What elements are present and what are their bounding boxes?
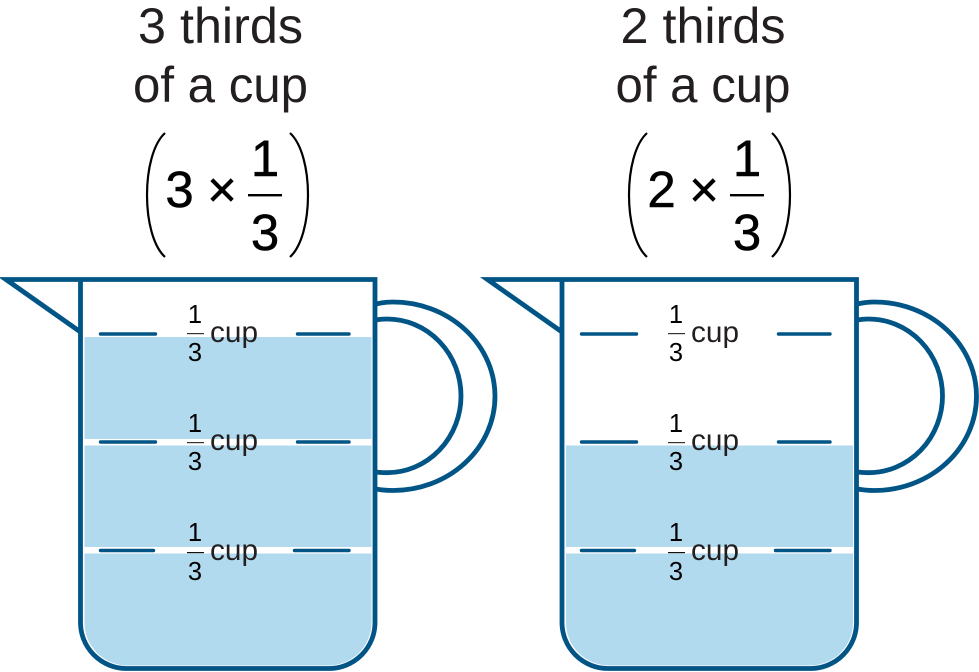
heading: 3 thirds of a cup (133, 0, 308, 113)
equation: 3 times one third (147, 130, 308, 261)
measure mark: middle one third cup: 3 (188, 448, 202, 476)
measure mark: middle one third cup (100, 410, 349, 476)
measure mark: middle one third cup: 1 (669, 410, 683, 438)
measure mark: top one third cup (100, 301, 349, 367)
measure mark: middle one third cup: cup (691, 424, 739, 457)
measure mark: bottom one third cup: 1 (669, 519, 683, 547)
heading: 2 thirds of a cup (616, 0, 790, 113)
measure mark: bottom one third cup: 1 (188, 519, 202, 547)
measure mark: top one third cup: cup (210, 316, 258, 349)
equation: 3 times one third: × (207, 161, 237, 218)
liquid fill: two thirds (566, 446, 853, 666)
measure mark: top one third cup: 3 (188, 339, 202, 367)
measure mark: bottom one third cup: 3 (669, 558, 683, 586)
measure mark: bottom one third cup: cup (210, 534, 258, 567)
measure mark: middle one third cup: 3 (669, 448, 683, 476)
measure mark: top one third cup: 3 (669, 339, 683, 367)
panel: three thirds of a cup (6, 0, 495, 668)
equation: 2 times one third: × (689, 161, 719, 218)
equation: 3 times one third: 3 (251, 204, 279, 261)
measure mark: top one third cup: cup (691, 316, 739, 349)
measure mark: top one third cup: 1 (188, 301, 202, 329)
measure mark: bottom one third cup: 3 (188, 558, 202, 586)
equation: 3 times one third: 3 (165, 161, 194, 218)
heading: 2 thirds of a cup: of a cup (616, 57, 790, 113)
liquid fill: three thirds (84, 337, 372, 666)
measuring cup outline (488, 280, 976, 668)
equation: 2 times one third: 2 (647, 161, 676, 218)
measure mark: bottom one third cup (582, 519, 830, 586)
equation: 2 times one third: 1 (733, 130, 761, 187)
measuring cup outline (6, 280, 495, 668)
measure mark: middle one third cup: cup (210, 424, 258, 457)
equation: 3 times one third: 1 (251, 130, 279, 187)
equation: 2 times one third: 3 (733, 204, 761, 261)
measure mark: bottom one third cup (100, 519, 349, 586)
heading: 3 thirds of a cup: of a cup (133, 57, 308, 113)
measure mark: top one third cup: 1 (669, 301, 683, 329)
measure mark: middle one third cup (582, 410, 830, 476)
measure mark: bottom one third cup: cup (691, 534, 739, 567)
measure mark: top one third cup (582, 301, 830, 367)
measure mark: middle one third cup: 1 (188, 410, 202, 438)
panel: two thirds of a cup (488, 0, 976, 668)
equation: 2 times one third (629, 130, 790, 261)
